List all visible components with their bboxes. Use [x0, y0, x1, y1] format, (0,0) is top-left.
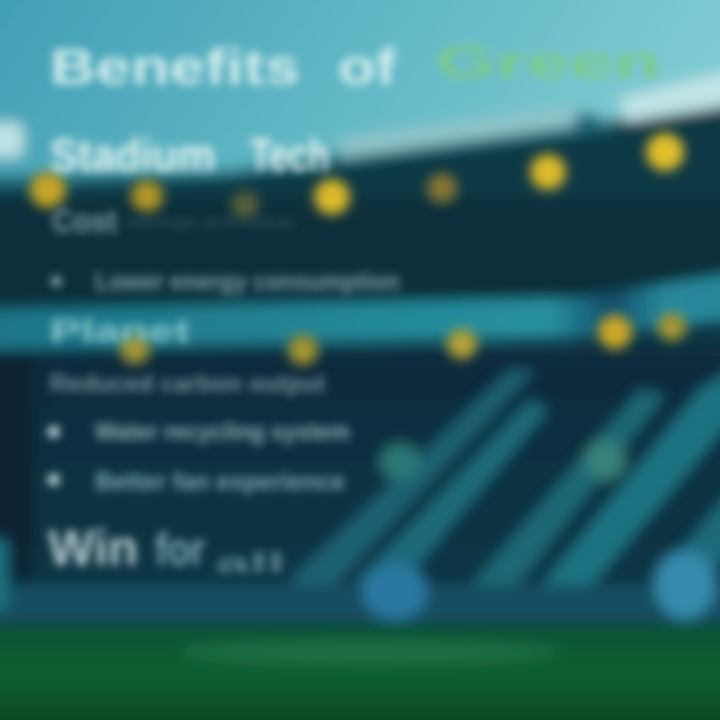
panel: pitch	[0, 624, 720, 720]
heading: economic benefits: savings and value	[125, 212, 295, 232]
text block: third benefit	[46, 407, 350, 456]
panel: upper seating	[0, 200, 720, 300]
text block: third benefit: Water recycling system	[95, 418, 350, 446]
footer text	[48, 520, 285, 578]
title: of	[338, 39, 396, 95]
text block: first benefit	[50, 260, 400, 301]
upper stadium lights	[30, 133, 684, 219]
text block: first benefit: Lower energy consumption	[95, 268, 400, 296]
title: Stadium	[50, 129, 215, 181]
title: Green	[436, 36, 661, 88]
text block: fourth benefit: Better fan experience	[95, 468, 345, 496]
title	[50, 36, 661, 181]
panel: teal concourse band	[0, 272, 720, 350]
footer text: all	[215, 547, 285, 578]
text block: third benefit: •	[46, 407, 61, 456]
heading: economic benefits	[52, 203, 295, 239]
text block: fourth benefit: •	[46, 455, 61, 504]
title: Benefits	[50, 39, 300, 95]
panel: sky	[0, 0, 720, 200]
lower stadium lights	[120, 313, 686, 365]
text block: first benefit: •	[50, 260, 63, 301]
panel: lower stands	[0, 350, 720, 625]
title: Tech	[250, 129, 330, 181]
heading: band label: Planet	[50, 313, 191, 349]
panel: stadium roof	[0, 68, 720, 320]
text block: fourth benefit	[46, 455, 345, 504]
text block: second benefit: Reduced carbon output	[50, 370, 326, 398]
footer text: for	[155, 523, 205, 575]
heading: economic benefits: Cost	[52, 203, 117, 239]
footer text: Win	[48, 520, 138, 576]
